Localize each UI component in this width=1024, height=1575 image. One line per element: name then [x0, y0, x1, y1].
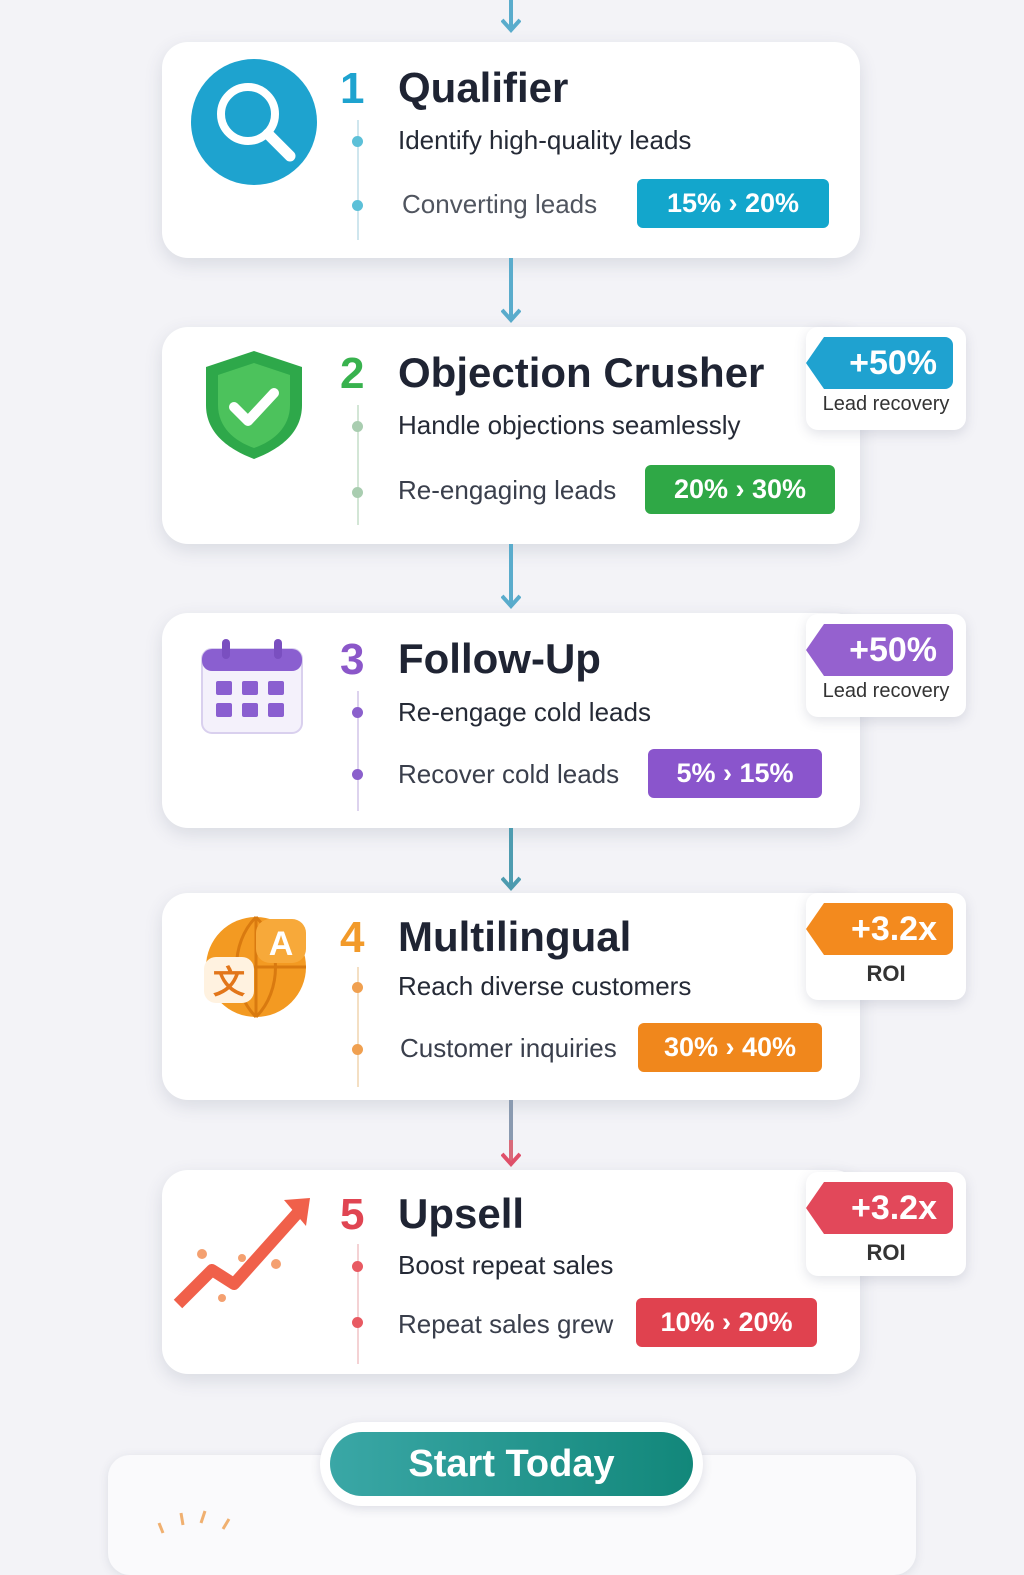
pill: 10% > 20%: 10% › 20%	[660, 1307, 793, 1337]
subtitle: Boost repeat sales	[398, 1250, 613, 1280]
metric: Recover cold leads	[398, 759, 619, 789]
pill: 5% > 15%	[648, 749, 822, 798]
pill: 15% > 20%	[637, 179, 829, 228]
icon: calendar	[201, 639, 303, 734]
metric: Customer inquiries	[400, 1033, 617, 1063]
badge: +3.2x ROI (red): +3.2x	[851, 1189, 937, 1227]
icon: rising arrow	[174, 1198, 310, 1308]
card 5: Upsell	[162, 1170, 860, 1374]
number 4: 4	[340, 913, 364, 962]
badge: +3.2x ROI (orange): +3.2x	[851, 910, 937, 948]
card 4: Multilingual	[162, 893, 860, 1100]
arrow 1-2	[501, 258, 521, 323]
icon: shield	[206, 351, 302, 459]
icon: sun rays	[158, 1510, 230, 1534]
title: Upsell	[398, 1190, 524, 1237]
pill: 30% > 40%: 30% › 40%	[664, 1032, 796, 1062]
subtitle: Reach diverse customers	[398, 971, 691, 1001]
subtitle: Re-engage cold leads	[398, 697, 651, 727]
number 1: 1	[340, 64, 364, 113]
icon: globe translate: A	[269, 925, 293, 963]
badge: +3.2x ROI (red)	[806, 1172, 966, 1276]
icon: magnifier	[191, 59, 317, 185]
arrow 2-3	[501, 544, 521, 609]
card 3: Follow-Up	[162, 613, 860, 828]
button: Start Today: Start Today	[408, 1443, 615, 1485]
icon: globe translate	[204, 916, 306, 1018]
metric: Repeat sales grew	[398, 1309, 613, 1339]
pill: 30% > 40%	[638, 1023, 822, 1072]
number 5: 5	[340, 1190, 364, 1239]
badge: +3.2x ROI (red): ROI	[866, 1240, 906, 1265]
badge: +3.2x ROI (orange): ROI	[866, 961, 906, 986]
pill: 5% > 15%: 5% › 15%	[676, 758, 794, 788]
subtitle: Handle objections seamlessly	[398, 410, 741, 440]
pill: 20% > 30%	[645, 465, 835, 514]
pill: 15% > 20%: 15% › 20%	[667, 188, 799, 218]
button: Start Today	[320, 1422, 703, 1506]
metric: Re-engaging leads	[398, 475, 616, 505]
arrow: top	[501, 0, 521, 33]
pill: 20% > 30%: 20% › 30%	[674, 474, 806, 504]
title: Qualifier	[398, 64, 568, 111]
pill: 10% > 20%	[636, 1298, 817, 1347]
subtitle: Identify high-quality leads	[398, 125, 691, 155]
number 3: 3	[340, 635, 364, 684]
number 2: 2	[340, 349, 364, 398]
card 1: Qualifier	[162, 42, 860, 258]
title: Objection Crusher	[398, 349, 764, 396]
card 2: Objection Crusher	[162, 327, 860, 544]
badge: +3.2x ROI (orange)	[806, 893, 966, 1000]
badge: +50% lead recovery (purple)	[806, 614, 966, 717]
badge: +50% lead recovery (blue): Lead recovery	[823, 393, 949, 415]
badge: +50% lead recovery (purple): +50%	[849, 631, 937, 669]
badge: +50% lead recovery (purple): Lead recovery	[823, 680, 949, 702]
arrow 4-5	[501, 1100, 521, 1167]
icon: globe translate: 文	[213, 964, 245, 1000]
title: Multilingual	[398, 913, 631, 960]
title: Follow-Up	[398, 635, 601, 682]
badge: +50% lead recovery (blue)	[806, 327, 966, 430]
metric: Converting leads	[402, 189, 597, 219]
arrow 3-4	[501, 828, 521, 891]
bottom panel	[108, 1455, 916, 1575]
badge: +50% lead recovery (blue): +50%	[849, 344, 937, 382]
